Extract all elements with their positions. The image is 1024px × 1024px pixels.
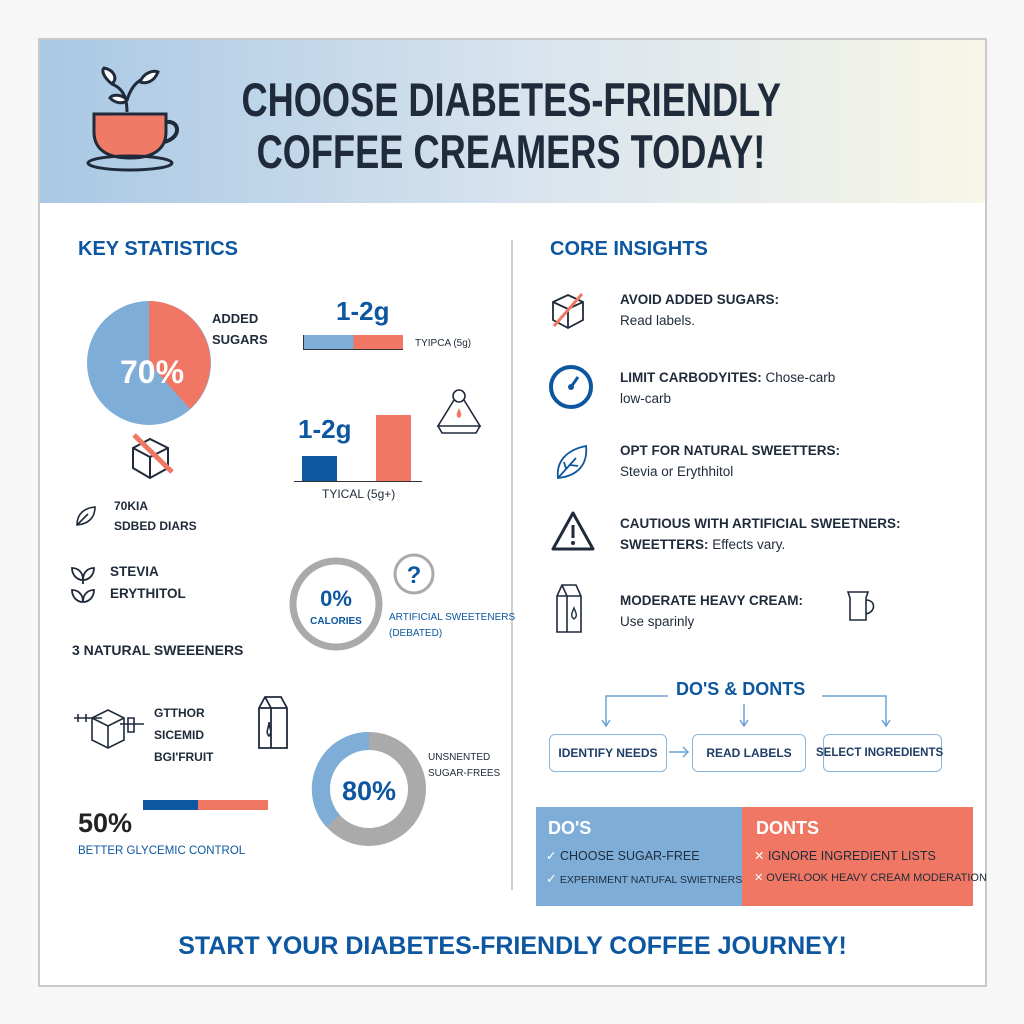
ring 80%: 80% <box>342 776 396 806</box>
stat: stevia erythritol: ERYTHITOL <box>110 586 186 601</box>
icon: coffee cup with plant <box>86 66 179 172</box>
panel: donts <box>742 807 973 906</box>
stat 1-2g bar: TYIPCA (5g) <box>415 338 471 349</box>
insight 4 <box>552 511 900 552</box>
insight 5: Use sparinly <box>620 614 694 629</box>
bar chart 1-2g vs typical: TYICAL (5g+) <box>322 487 395 501</box>
icon: box with tools <box>74 709 144 749</box>
icon: warning drop <box>436 389 482 434</box>
text list: SICEMID <box>154 728 204 742</box>
flow: select ingredients <box>823 734 942 772</box>
label artificial sweeteners <box>389 612 515 639</box>
ring 80% <box>312 732 426 846</box>
ring 0% calories: 0% <box>320 586 352 611</box>
stat: leaf text <box>76 499 197 533</box>
flow: identify needs <box>549 734 667 772</box>
insight 2: LIMIT CARBODYITES: Chose-carb <box>620 370 835 385</box>
stat: leaf text: SDBED DIARS <box>114 519 197 533</box>
flow: read labels <box>692 734 806 772</box>
label artificial sweeteners: ARTIFICIAL SWEETENERS <box>389 612 515 623</box>
divider <box>511 240 513 890</box>
panel: do's: DO'S <box>548 818 591 838</box>
stat 1-2g bar <box>303 296 471 350</box>
label artificial sweeteners: (DEBATED) <box>389 628 442 639</box>
panel: do's: ✓ EXPERIMENT NATUFAL SWIETNERS <box>546 871 742 886</box>
label added sugars <box>212 311 268 347</box>
panel: donts: ✕ OVERLOOK HEAVY CREAM MODERATION <box>754 872 987 884</box>
flow: identify needs: IDENTIFY NEEDS <box>558 746 658 760</box>
insight 1: AVOID ADDED SUGARS: <box>620 292 779 307</box>
flow arrows <box>602 695 890 728</box>
header band <box>40 40 985 203</box>
insight 3: Stevia or Erythhitol <box>620 464 733 479</box>
stat: stevia erythritol: STEVIA <box>110 564 159 579</box>
stat: leaf text: 70KIA <box>114 499 148 513</box>
text list: GTTHOR <box>154 706 205 720</box>
stat 50%: 50% <box>78 808 132 838</box>
heading: core insights: CORE INSIGHTS <box>550 238 708 260</box>
label added sugars: ADDED <box>212 311 258 326</box>
heading: key statistics: KEY STATISTICS <box>78 238 238 260</box>
panel: donts: DONTS <box>756 818 819 838</box>
ring 0% calories <box>290 558 382 650</box>
insight 1: Read labels. <box>620 313 695 328</box>
icon: crossed sugar cube <box>132 433 174 480</box>
insight 3: OPT FOR NATURAL SWEETTERS: <box>620 443 840 458</box>
label unsweetened <box>428 752 500 779</box>
insight 2 <box>549 365 835 409</box>
panel: do's <box>536 807 743 906</box>
title <box>242 73 781 178</box>
insight 4: SWEETTERS: Effects vary. <box>620 537 785 552</box>
label added sugars: SUGARS <box>212 332 268 347</box>
insight 2: low-carb <box>620 391 671 406</box>
title: CHOOSE DIABETES-FRIENDLY <box>242 73 781 126</box>
insight 3 <box>556 443 840 479</box>
bar chart 1-2g vs typical: 1-2g <box>298 414 351 444</box>
icon: question circle <box>394 554 434 594</box>
insight 4: CAUTIOUS WITH ARTIFICIAL SWEETNERS: <box>620 516 900 531</box>
panel: do's: ✓ CHOOSE SUGAR-FREE <box>546 849 700 863</box>
insight 5: MODERATE HEAVY CREAM: <box>620 593 803 608</box>
stat: stevia erythritol <box>71 564 186 603</box>
text list <box>154 706 214 764</box>
flow: select ingredients: SELECT INGREDIENTS <box>816 747 943 759</box>
pie chart 70% <box>87 301 211 425</box>
heading: do's & donts: DO'S & DONTS <box>676 679 805 699</box>
ring 0% calories: CALORIES <box>310 616 362 627</box>
label better glycemic: BETTER GLYCEMIC CONTROL <box>78 845 245 857</box>
text list: BGI'FRUIT <box>154 750 214 764</box>
footer call to action: START YOUR DIABETES-FRIENDLY COFFEE JOURNEY! <box>178 932 847 960</box>
insight 1 <box>552 292 779 329</box>
bar chart 1-2g vs typical <box>294 414 422 501</box>
icon: milk carton <box>258 696 288 749</box>
insight 5 <box>556 584 874 633</box>
label unsweetened: UNSNENTED <box>428 752 490 763</box>
label unsweetened: SUGAR-FREES <box>428 768 500 779</box>
arrow <box>669 746 689 758</box>
bar 50% <box>143 800 268 810</box>
pie chart 70%: 70% <box>120 354 184 390</box>
icon: question circle: ? <box>407 562 421 589</box>
stat 1-2g bar: 1-2g <box>336 296 389 326</box>
flow: read labels: READ LABELS <box>706 746 792 760</box>
stat: 3 natural sweeteners: 3 NATURAL SWEEENERS <box>72 642 243 658</box>
title: COFFEE CREAMERS TODAY! <box>257 125 765 178</box>
panel: donts: ✕ IGNORE INGREDIENT LISTS <box>754 849 936 863</box>
